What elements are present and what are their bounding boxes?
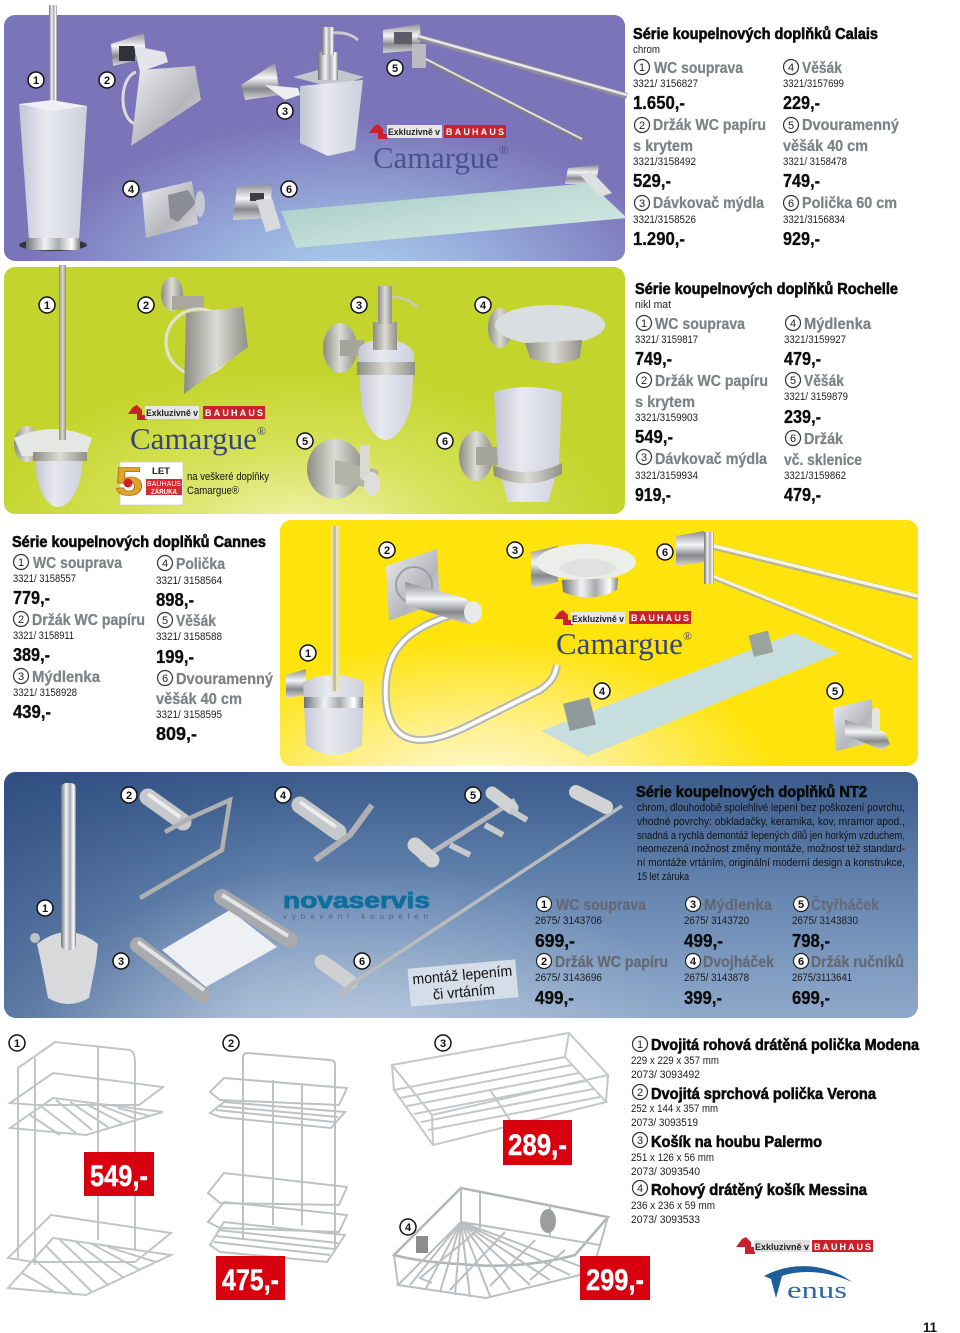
logo: Camargue: Camargue [556, 626, 683, 661]
badge 2: 2 [104, 75, 110, 87]
item 3: Mýdlenka [32, 669, 100, 686]
item 3: Mýdlenka [704, 897, 772, 914]
item 3: 3 [639, 198, 645, 210]
product: soap dispenser [241, 27, 364, 156]
logo: Exkluzivně v BAUHAUS: BAUHAUS [446, 127, 504, 137]
badge 4 [123, 181, 139, 197]
badge 1 [39, 297, 55, 313]
price tag: 289 [503, 1120, 572, 1165]
badge 4 [275, 787, 291, 803]
item 1 [635, 316, 745, 369]
item 5: Věšák [804, 373, 844, 390]
item 3 [684, 896, 772, 951]
item 5 [784, 372, 848, 427]
badge 2 [121, 787, 137, 803]
item 2: 3321/3159903 [635, 412, 698, 424]
item 5: 3321/ 3159879 [784, 391, 848, 403]
logo: Exkluzivně v BAUHAUS: Exkluzivně v [146, 408, 198, 418]
item 1: WC souprava [654, 60, 743, 77]
badge 2 [223, 1035, 239, 1051]
item 2: Držák WC papíru [655, 373, 768, 390]
logo: Exkluzivně v BAUHAUS: BAUHAUS [631, 613, 689, 623]
logo: novaservis [283, 888, 430, 921]
item 6: Držák ručníků [811, 954, 904, 971]
item 2: 2073/ 3093519 [631, 1117, 698, 1129]
item 4: 2073/ 3093533 [631, 1214, 700, 1226]
product: toilet brush [19, 5, 87, 251]
item 4: 399,- [684, 987, 722, 1008]
logo: Venus [764, 1266, 852, 1304]
item 4: 2675/ 3143878 [684, 972, 749, 984]
item 2 [631, 1084, 876, 1129]
item 4: Mýdlenka [804, 316, 871, 333]
item 1: 749,- [635, 348, 672, 369]
item 5: Čtyřháček [811, 895, 879, 914]
item 4 [684, 954, 774, 1008]
badge 2: 2 [143, 300, 149, 312]
product: toilet brush [14, 265, 92, 507]
item 2: 2 [18, 614, 24, 626]
item 2: Dvojitá sprchová polička Verona [651, 1086, 876, 1103]
item 4: 236 x 236 x 59 mm [631, 1200, 715, 1212]
item 3 [635, 450, 767, 505]
product: hook [833, 699, 890, 751]
item 1: 1 [541, 899, 547, 911]
item 6 [156, 670, 273, 744]
item 3: Dávkovač mýdla [655, 451, 767, 468]
product: glass shelf [233, 165, 627, 248]
item 6: 809,- [156, 723, 197, 744]
badge 1: 1 [305, 648, 311, 660]
text block: NT2 [535, 784, 905, 1008]
item 2: 252 x 144 x 357 mm [631, 1103, 718, 1115]
badge 6 [657, 544, 673, 560]
label: mounting note: montáž lepením [412, 963, 513, 988]
item 1: 3321/ 3156827 [633, 78, 698, 90]
text block: Rochelle [635, 281, 898, 505]
item 4: 479,- [784, 348, 821, 369]
badge 4 [594, 683, 610, 699]
item 3 [13, 668, 100, 722]
description: chrom, dlouhodobě spolehlivé lepení bez poškození povrchu, [637, 802, 905, 814]
badge 6 [281, 181, 297, 197]
text block: Calais [633, 26, 899, 249]
product: soap dish [531, 544, 636, 598]
badge 6: 6 [442, 436, 448, 448]
item 2: 499,- [535, 987, 574, 1008]
item 1: 779,- [13, 587, 50, 608]
item 4 [156, 556, 225, 610]
item 5 [792, 895, 879, 951]
product: paper holder with cover [111, 33, 201, 146]
badge 6: 6 [662, 547, 668, 559]
guarantee note: Camargue® [187, 485, 239, 497]
badge 4: 4 [128, 184, 135, 196]
product: double towel rail [383, 24, 627, 140]
badge 1: 1 [44, 300, 50, 312]
price tag: 549 [84, 1152, 154, 1196]
item 4: 4 [788, 62, 794, 74]
badge 6: 6 [359, 956, 365, 968]
item 5: 5 [788, 120, 794, 132]
item 3: 1.290,- [633, 228, 685, 249]
item 2 [635, 372, 768, 447]
item 1: 3321/ 3159817 [635, 334, 698, 346]
item 1: 699,- [535, 930, 575, 951]
item 2: s krytem [635, 394, 695, 411]
item 4: 229,- [783, 92, 820, 113]
logo: Exkluzivně v BAUHAUS: BAUHAUS [205, 408, 263, 418]
logo: Camargue: ® [683, 629, 692, 643]
5 year guarantee badge [115, 460, 183, 505]
badge 5: 5 [392, 63, 398, 75]
description: ní montáže vrtáním, originální moderní design a konstrukce, [637, 857, 905, 869]
badge 2 [99, 72, 115, 88]
item 1: Dvojitá rohová drátěná polička Modena [651, 1037, 919, 1054]
logo: Venus: enus [787, 1278, 847, 1304]
badge 3: 3 [440, 1038, 446, 1050]
item 3: 919,- [635, 484, 671, 505]
logo: Exkluzivně v BAUHAUS [369, 124, 506, 139]
badge 2 [138, 297, 154, 313]
item 1 [13, 554, 122, 608]
badge 2: 2 [384, 545, 390, 557]
item 4: Rohový drátěný košík Messina [651, 1182, 867, 1199]
badge 4 [475, 297, 491, 313]
badge 1 [28, 72, 44, 88]
price tag: 289: 289,- [508, 1129, 567, 1162]
finish: chrom [633, 44, 660, 56]
item 3: 3 [690, 899, 696, 911]
badge 3: 3 [282, 106, 288, 118]
item 5: 749,- [783, 170, 820, 191]
item 5: 798,- [792, 930, 830, 951]
item 1: 229 x 229 x 357 mm [631, 1055, 719, 1067]
item 6: 6 [162, 673, 168, 685]
item 6: 2675/3113641 [792, 972, 852, 984]
heading: Série koupelnových doplňků Cannes [12, 534, 266, 551]
item 3: 2073/ 3093540 [631, 1166, 700, 1178]
price tag: 549: 549,- [90, 1160, 148, 1193]
item 5: věšák 40 cm [783, 138, 868, 155]
item 5: Věšák [176, 613, 216, 630]
badge 4: 4 [480, 300, 487, 312]
text block: Cannes [12, 534, 273, 744]
item 6 [784, 430, 862, 505]
item 4: 3321/ 3158564 [156, 575, 222, 587]
item 1: 1 [639, 62, 645, 74]
item 5: 3321/ 3158478 [783, 156, 847, 168]
badge 4 [400, 1219, 416, 1235]
item 2: 3321/ 3158911 [13, 630, 74, 642]
price tag: 299: 299,- [586, 1264, 644, 1297]
item 2: Držák WC papíru [653, 117, 766, 134]
item 6: 479,- [784, 484, 821, 505]
item 6: 3321/ 3158595 [156, 709, 222, 721]
badge 5 [297, 433, 313, 449]
guarantee note [187, 471, 270, 497]
badge 1: 1 [14, 1038, 20, 1050]
price tag: 299 [580, 1256, 650, 1300]
logo: Exkluzivně v BAUHAUS [736, 1237, 873, 1254]
item 4: 3321/3159927 [784, 334, 846, 346]
item 3: 3321/ 3158928 [13, 687, 77, 699]
item 2: s krytem [633, 138, 693, 155]
item 3: Košík na houbu Palermo [651, 1134, 822, 1151]
item 6: 699,- [792, 987, 830, 1008]
item 2: 2 [637, 1087, 643, 1099]
badge 3: 3 [118, 956, 124, 968]
item 3 [633, 195, 764, 249]
item 6: 3321/3156834 [783, 214, 845, 226]
badge 1 [9, 1035, 25, 1051]
item 4: 4 [790, 318, 796, 330]
item 1: 1 [637, 1039, 643, 1051]
item 6: Dvouramenný [176, 671, 273, 688]
item 5: 5 [798, 899, 804, 911]
guarantee note: na veškeré doplňky [187, 471, 270, 483]
logo: Camargue: Camargue [373, 140, 500, 175]
logo: Camargue: ® [257, 424, 266, 438]
product: corner basket Messina [394, 1188, 608, 1298]
5 year guarantee badge: ZÁRUKA [151, 487, 177, 496]
heading: Série koupelnových doplňků Rochelle [635, 281, 898, 298]
item 3: 251 x 126 x 56 mm [631, 1152, 714, 1164]
badge 1: 1 [42, 903, 48, 915]
item 4 [783, 60, 844, 113]
5 year guarantee badge: 5 [115, 460, 143, 504]
item 2: 529,- [633, 170, 671, 191]
item 3: Dávkovač mýdla [653, 195, 764, 212]
product: toilet brush [286, 526, 364, 755]
item 2: Držák WC papíru [555, 954, 668, 971]
item 3: 439,- [13, 701, 51, 722]
label: mounting note [408, 959, 518, 1007]
product: double hook [300, 802, 372, 860]
item 6: 6 [798, 956, 804, 968]
item 4: Dvojháček [703, 954, 774, 971]
item 4: 898,- [156, 589, 194, 610]
logo: Camargue: ® [499, 143, 508, 157]
item 5: 199,- [156, 646, 194, 667]
badge 3 [277, 103, 293, 119]
badge 1 [300, 645, 316, 661]
item 5: 239,- [784, 406, 821, 427]
badge 5 [387, 60, 403, 76]
logo: novaservis: novaservis [283, 888, 430, 913]
item 1: 2073/ 3093492 [631, 1069, 700, 1081]
product: four hooks [415, 793, 527, 860]
product: glass shelf [541, 631, 839, 756]
description: 15 let záruka [637, 871, 689, 883]
badge 5: 5 [832, 686, 838, 698]
item 1: WC souprava [33, 555, 122, 572]
item 6: Polička 60 cm [802, 195, 897, 212]
product: hook [142, 181, 205, 238]
item 1: 2675/ 3143706 [535, 915, 602, 927]
badge 5 [827, 683, 843, 699]
item 3: 3321/3158526 [633, 214, 696, 226]
item 6: věšák 40 cm [156, 691, 242, 708]
heading: Série koupelnových doplňků NT2 [636, 784, 867, 801]
badge 3 [507, 542, 523, 558]
badge 6 [354, 953, 370, 969]
product: paper holder [140, 794, 230, 898]
logo: novaservis: vybavení koupelen [283, 912, 428, 921]
logo: Camargue: Camargue [130, 421, 257, 456]
item 6: 929,- [783, 228, 820, 249]
item 6 [792, 954, 904, 1008]
item 1 [535, 896, 646, 951]
finish: nikl mat [635, 299, 672, 311]
product: shower shelf Verona [208, 1053, 347, 1262]
item 3: 3 [641, 452, 647, 464]
badge 6 [437, 433, 453, 449]
5 year guarantee badge: BAUHAUS [147, 481, 181, 488]
badge 2: 2 [228, 1038, 234, 1050]
item 3: 3 [637, 1135, 643, 1147]
product: tumbler holder [459, 387, 562, 502]
item 4 [631, 1180, 867, 1226]
item 2: 2 [541, 956, 547, 968]
item 4 [784, 316, 871, 369]
item 2: 2675/ 3143696 [535, 972, 602, 984]
description: vhodné povrchy: obkladačky, keramika, kov, mramor apod., [637, 816, 905, 828]
item 1 [633, 60, 743, 113]
item 1: 1 [641, 318, 647, 330]
item 2: 2 [641, 375, 647, 387]
badge 3 [351, 297, 367, 313]
item 2: 2 [639, 120, 645, 132]
item 5 [783, 117, 899, 191]
logo: Exkluzivně v BAUHAUS [128, 405, 265, 420]
heading: Série koupelnových doplňků Calais [633, 26, 878, 43]
item 6 [783, 195, 897, 249]
item 6: Držák [804, 431, 843, 448]
item 2 [535, 954, 668, 1008]
product: towel bar [322, 792, 622, 995]
item 2: 389,- [13, 644, 50, 665]
item 5 [156, 612, 222, 667]
badge 3: 3 [512, 545, 518, 557]
product: soap dispenser [323, 286, 418, 440]
item 4: 4 [162, 558, 168, 570]
badge 3 [435, 1035, 451, 1051]
item 5: Dvouramenný [802, 117, 899, 134]
product: soap dish [488, 305, 605, 363]
badge 4: 4 [280, 790, 287, 802]
badge 1 [37, 900, 53, 916]
description [637, 802, 905, 883]
item 5: 5 [162, 615, 168, 627]
label: mounting note: či vrtáním [432, 981, 495, 1004]
badge 5: 5 [302, 436, 308, 448]
item 2: 549,- [635, 426, 673, 447]
item 1: 1.650,- [633, 92, 685, 113]
item 1: 3321/ 3158557 [13, 573, 76, 585]
item 1 [631, 1036, 919, 1081]
price tag: 475: 475,- [222, 1264, 279, 1297]
item 6: vč. sklenice [784, 452, 862, 469]
panel: Cannes [280, 520, 918, 766]
item 3: 499,- [684, 930, 723, 951]
badge 1: 1 [33, 75, 39, 87]
badge 6: 6 [286, 184, 292, 196]
suction cups [416, 1209, 556, 1253]
item 1: WC souprava [655, 316, 745, 333]
product: towel ring [386, 549, 557, 740]
logo: Exkluzivně v BAUHAUS: Exkluzivně v [388, 127, 440, 137]
badge 2 [379, 542, 395, 558]
item 4: 4 [637, 1183, 643, 1195]
logo: Exkluzivně v BAUHAUS: BAUHAUS [814, 1242, 871, 1252]
item 6: 3321/3159862 [784, 470, 846, 482]
badge 5 [465, 787, 481, 803]
item 1: WC souprava [556, 897, 646, 914]
product: sponge basket Palermo [392, 1033, 608, 1145]
logo: Exkluzivně v BAUHAUS [554, 610, 691, 625]
item 5: 2675/ 3143830 [792, 915, 858, 927]
item 2 [13, 612, 145, 665]
product: double towel rail [676, 531, 918, 658]
text block: wire shelves [631, 1036, 919, 1226]
panel: Rochelle [4, 265, 625, 514]
item 3: 3 [18, 671, 24, 683]
item 6: 6 [790, 433, 796, 445]
item 4: Věšák [802, 60, 842, 77]
product: soap dish [138, 895, 290, 995]
product: corner shelf Modena [8, 1042, 171, 1295]
product: hook [307, 439, 380, 499]
item 2: 3321/3158492 [633, 156, 696, 168]
description: snadná a rychlá demontáž lepených dílů jen horkým vzduchem, [637, 830, 905, 842]
price tag: 475 [216, 1256, 285, 1300]
badge 4: 4 [599, 686, 606, 698]
badge 4: 4 [405, 1222, 412, 1234]
item 5: 3321/ 3158588 [156, 631, 222, 643]
item 4: 4 [690, 956, 697, 968]
panel: Calais [4, 5, 627, 261]
5 year guarantee badge: LET [152, 466, 170, 477]
logo: Exkluzivně v BAUHAUS: Exkluzivně v [755, 1242, 809, 1252]
badge 5: 5 [470, 790, 476, 802]
item 1: 1 [18, 557, 24, 569]
product: toilet brush [30, 783, 98, 1004]
badge 3 [113, 953, 129, 969]
item 2: Držák WC papíru [32, 612, 145, 629]
item 3: 3321/3159934 [635, 470, 698, 482]
item 2 [633, 117, 766, 191]
item 3 [631, 1132, 822, 1178]
item 4: Polička [176, 556, 225, 573]
logo: Exkluzivně v BAUHAUS: Exkluzivně v [572, 614, 624, 624]
item 4: 3321/3157699 [783, 78, 844, 90]
panel: NT2 [4, 772, 918, 1018]
badge 3: 3 [356, 300, 362, 312]
description: neomezená možnost změny montáže, možnost též standard- [637, 843, 905, 855]
item 6: 6 [788, 198, 794, 210]
item 3: 2675/ 3143720 [684, 915, 749, 927]
item 5: 5 [790, 375, 796, 387]
product: paper holder [161, 277, 248, 394]
badge 2: 2 [126, 790, 132, 802]
